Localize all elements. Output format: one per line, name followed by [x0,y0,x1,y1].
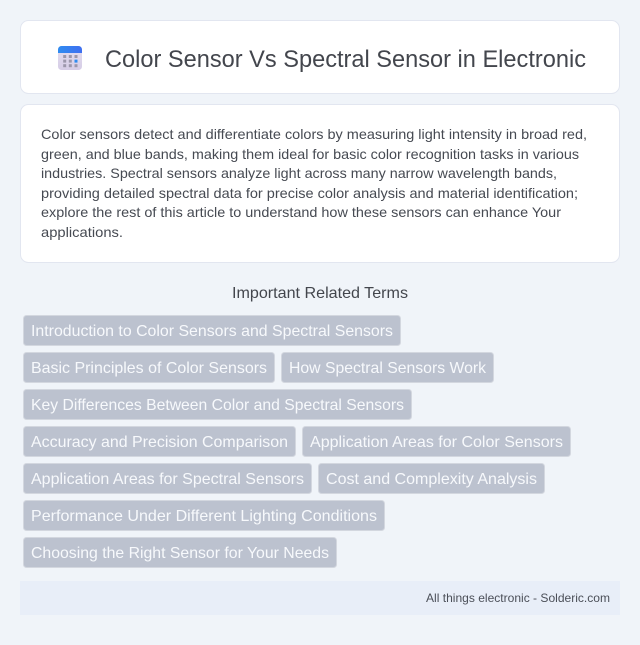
icon: calendar grid [58,46,82,70]
tag: application areas spectral [24,464,312,494]
footer credit: All things electronic - Solderic.com [426,591,610,605]
footer [20,581,620,615]
tag: how spectral sensors work: How Spectral Sensors Work [289,360,487,377]
tag: accuracy and precision: Accuracy and Precision Comparison [31,434,288,451]
text block: summary paragraph: Color sensors detect and differentiate colors by measuring light intensity in broad red, [41,126,587,142]
tag: introduction [24,316,400,346]
text block: summary paragraph: providing detailed spectral data for precise color analysis and material identification; [41,185,578,201]
tag: application areas color [302,426,570,456]
panel: summary text [20,104,620,262]
text block: summary paragraph: applications. [41,224,123,240]
tag: choosing the right sensor [24,538,336,568]
tag: lighting performance [24,500,384,530]
tag: lighting performance: Performance Under Different Lighting Conditions [31,508,377,525]
tag: introduction: Introduction to Color Sensors and Spectral Sensors [31,323,393,340]
text block: summary paragraph: industries. Spectral sensors analyze light across many narrow wavelength bands, [41,165,557,181]
tag: choosing the right sensor: Choosing the Right Sensor for Your Needs [31,545,329,562]
tag: key differences: Key Differences Between Color and Spectral Sensors [31,397,404,414]
panel: title card [20,20,620,94]
panel: related term tags [24,316,570,568]
tag: cost and complexity: Cost and Complexity Analysis [326,471,537,488]
text block: summary paragraph [41,126,587,240]
tag: key differences [24,390,412,420]
text block: summary paragraph: green, and blue bands, making them ideal for basic color recognition tasks in various [41,146,579,162]
tag: accuracy and precision [24,426,296,456]
text block: summary paragraph: explore the rest of this article to understand how these sensors can enhance Your [41,204,561,220]
heading: related terms: Important Related Terms [232,285,408,302]
tag: application areas spectral: Application Areas for Spectral Sensors [31,471,304,488]
tag: how spectral sensors work [282,352,494,382]
tag: basic principles: Basic Principles of Color Sensors [31,360,267,377]
tag: cost and complexity [318,464,544,494]
tag: application areas color: Application Areas for Color Sensors [310,434,563,451]
tag: basic principles [24,352,274,382]
title: Color Sensor Vs Spectral Sensor in Electronic [105,46,586,73]
